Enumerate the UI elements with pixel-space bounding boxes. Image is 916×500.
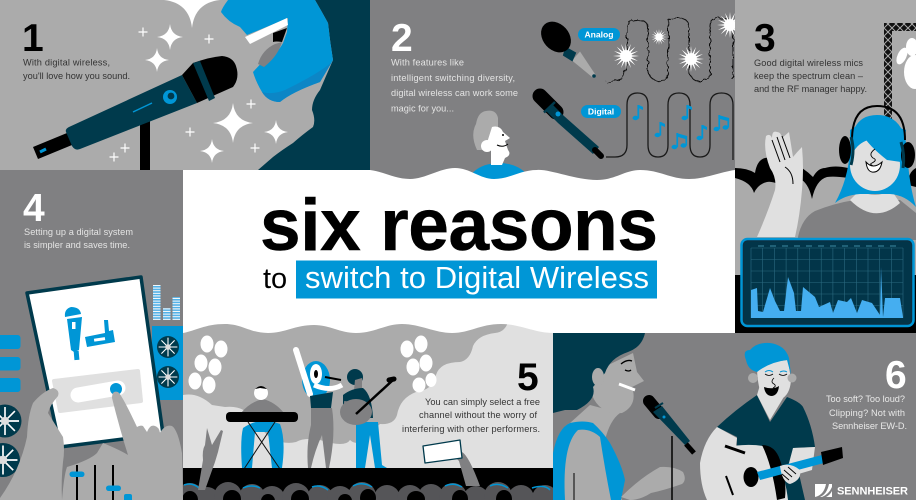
peace hand bbox=[198, 428, 223, 490]
music notes bbox=[632, 105, 729, 149]
raised hand bbox=[757, 132, 803, 237]
blue rack left bbox=[0, 335, 20, 392]
panel 3: RF manager bbox=[735, 0, 916, 333]
text 3: and the RF manager happy. bbox=[754, 84, 867, 94]
panel 4: simple setup bbox=[0, 170, 183, 500]
text 2: intelligent switching diversity, bbox=[391, 73, 515, 83]
text 6: Sennheiser EW-D. bbox=[832, 421, 907, 431]
panel 2: switching diversity bbox=[370, 0, 735, 180]
guitarist bbox=[340, 369, 394, 468]
panel 1: digital sound bbox=[0, 0, 370, 170]
text 5: channel without the worry of bbox=[419, 410, 537, 420]
audience bbox=[176, 482, 558, 500]
digital microphone bbox=[540, 96, 601, 156]
singer dark background bbox=[258, 0, 370, 170]
clouds bbox=[183, 322, 553, 470]
text 2: With features like bbox=[391, 58, 464, 68]
text 5: interfering with other performers. bbox=[402, 424, 540, 434]
sparkles bbox=[110, 0, 288, 163]
spectrum monitor bbox=[742, 239, 914, 326]
text 4: is simpler and saves time. bbox=[24, 240, 130, 250]
analog microphone bbox=[541, 22, 596, 78]
text 6 bbox=[826, 394, 907, 431]
level meter bbox=[153, 285, 180, 320]
number 6: 6 bbox=[885, 354, 907, 397]
singer bbox=[296, 350, 342, 468]
analog noisy waveform bbox=[607, 18, 733, 83]
phone and arm bbox=[423, 440, 480, 486]
subtitle banner: switch to Digital Wireless bbox=[305, 260, 649, 295]
truss bbox=[884, 23, 916, 120]
noise bursts bbox=[613, 12, 743, 72]
digital label bbox=[581, 105, 621, 118]
number 4: 4 bbox=[23, 187, 45, 230]
spotlight blobs bbox=[894, 38, 916, 89]
speakers bbox=[0, 336, 179, 477]
digital label: Digital bbox=[588, 106, 614, 116]
text 6: Too soft? Too loud? bbox=[826, 394, 905, 404]
text 4: Setting up a digital system bbox=[24, 227, 133, 237]
faders bbox=[70, 465, 132, 500]
tablet mic and receiver icon bbox=[65, 307, 115, 360]
analog label: Analog bbox=[584, 29, 614, 39]
woman singer bbox=[553, 333, 685, 500]
listening person bbox=[473, 110, 524, 179]
text 2: digital wireless can work some bbox=[391, 88, 518, 98]
text 4 bbox=[24, 227, 133, 250]
tablet slider bbox=[54, 371, 141, 411]
guitar player bbox=[700, 343, 843, 500]
stand and microphone bbox=[649, 401, 694, 500]
microphone bbox=[33, 56, 237, 159]
text 1: With digital wireless, bbox=[23, 58, 110, 68]
panel 5: free channel bbox=[176, 322, 558, 500]
crowd silhouette bbox=[735, 158, 916, 199]
woman with headphones bbox=[798, 106, 916, 240]
text 5: You can simply select a free bbox=[425, 397, 540, 407]
sennheiser logo: SENNHEISER bbox=[837, 486, 908, 498]
singer blue face bbox=[221, 0, 333, 102]
number 5: 5 bbox=[517, 356, 539, 399]
keyboard player bbox=[226, 386, 298, 469]
panel 6: sennheiser performers bbox=[553, 333, 916, 500]
subtitle word: to: to bbox=[263, 263, 287, 295]
text 2: magic for you... bbox=[391, 104, 454, 114]
stage bbox=[183, 468, 553, 500]
text 3 bbox=[754, 58, 867, 94]
blue rack right bbox=[152, 326, 183, 400]
number 1: 1 bbox=[22, 17, 44, 60]
text 3: keep the spectrum clean – bbox=[754, 71, 864, 81]
text 3: Good digital wireless mics bbox=[754, 58, 863, 68]
black stage band bbox=[735, 275, 916, 333]
text 6: Clipping? Not with bbox=[829, 408, 905, 418]
title: six reasons: six reasons bbox=[260, 185, 658, 266]
sennheiser logo bbox=[815, 484, 908, 498]
number 3: 3 bbox=[754, 17, 776, 60]
text 1: you'll love how you sound. bbox=[23, 71, 130, 81]
number 2: 2 bbox=[391, 17, 413, 60]
tablet bbox=[27, 277, 163, 447]
text 5 bbox=[402, 397, 540, 434]
digital clean waveform bbox=[606, 93, 733, 160]
center title panel bbox=[183, 168, 735, 333]
mic stand bbox=[140, 120, 150, 170]
text 1 bbox=[23, 58, 130, 81]
analog label bbox=[578, 28, 620, 41]
stage lights right bbox=[400, 336, 436, 392]
hands bbox=[0, 388, 183, 500]
stage lights left bbox=[188, 336, 228, 394]
text 2 bbox=[391, 58, 518, 114]
